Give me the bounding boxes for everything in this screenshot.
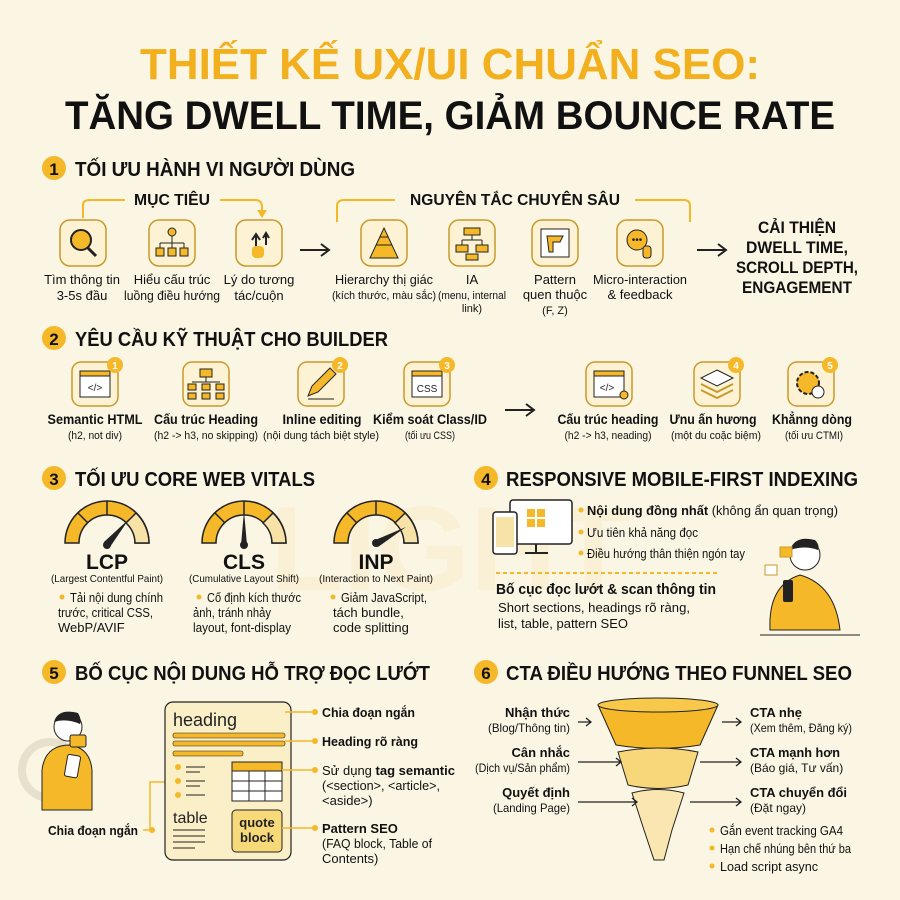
icon: semantic html: </> xyxy=(88,383,102,394)
panel: builder items: (nội dung tách biệt style) xyxy=(263,430,379,442)
icon: layers xyxy=(694,357,744,406)
panel: funnel: Load script async xyxy=(720,859,818,874)
panel: muc tieu xyxy=(44,190,294,303)
panel: gauges: (Cumulative Layout Shift) xyxy=(189,573,299,585)
panel: content layout: Sử dụng tag semantic xyxy=(322,763,455,778)
panel: gauges: (Interaction to Next Paint) xyxy=(319,573,433,585)
icon: IA xyxy=(449,220,495,266)
icon: person with phone xyxy=(760,539,860,635)
text block: result: CẢI THIỆN xyxy=(758,218,836,237)
panel: gauges: CLS xyxy=(223,551,265,574)
icon: pyramid xyxy=(361,220,407,266)
heading 4: 4 xyxy=(481,470,491,489)
icon: css: 3 xyxy=(444,361,450,372)
panel: gauges xyxy=(51,501,433,635)
panel: nguyen tac: Micro-interaction xyxy=(593,272,687,287)
gauge INP xyxy=(334,501,418,547)
panel: funnel: Cân nhắc xyxy=(511,745,570,760)
icon: micro-interaction xyxy=(617,220,663,266)
arrow xyxy=(300,244,329,256)
panel: content layout: Heading rõ ràng xyxy=(322,734,418,749)
panel: gauges: Tải nội dung chính xyxy=(70,590,163,605)
panel: funnel: Nhận thức xyxy=(505,705,570,720)
panel: funnel: CTA mạnh hơn xyxy=(750,745,840,760)
text block: result: SCROLL DEPTH, xyxy=(736,258,858,277)
icon: gear xyxy=(788,357,838,406)
heading 2: 2 xyxy=(49,330,59,349)
icon: layers: 4 xyxy=(733,361,739,372)
panel: funnel: (Landing Page) xyxy=(493,801,570,815)
panel: funnel: (Xem thêm, Đăng ký) xyxy=(750,721,852,735)
document panel: block xyxy=(240,830,275,845)
heading 5: BỐ CỤC NỘI DUNG HỖ TRỢ ĐỌC LƯỚT xyxy=(75,661,430,685)
icon: scroll xyxy=(236,220,282,266)
panel: builder results: (h2 -> h3, neading) xyxy=(564,430,652,442)
heading 6: 6 xyxy=(481,664,491,683)
panel: funnel: Hạn chế nhúng bên thứ ba xyxy=(720,841,852,856)
panel: content layout: <aside>) xyxy=(322,793,373,808)
panel: gauges: Cố định kích thước xyxy=(207,590,301,605)
icon: semantic html: 1 xyxy=(112,361,118,372)
icon: pattern xyxy=(532,220,578,266)
panel: muc tieu: tác/cuộn xyxy=(234,288,284,303)
panel: builder items: (h2 -> h3, no skipping) xyxy=(154,430,258,442)
panel: muc tieu: Tìm thông tin xyxy=(44,272,120,287)
heading 5: 5 xyxy=(49,664,59,683)
heading 2: YÊU CẦU KỸ THUẬT CHO BUILDER xyxy=(75,327,388,351)
panel: mobile first: Nội dung đồng nhất (không ẩn quan trọng) xyxy=(587,503,838,518)
gauge CLS xyxy=(202,501,286,549)
icon: code xyxy=(586,362,632,406)
panel: gauges: layout, font-display xyxy=(193,620,291,635)
panel: gauges: (Largest Contentful Paint) xyxy=(51,573,163,585)
panel: builder results: Cấu trúc heading xyxy=(558,411,658,427)
panel: gauges: tách bundle, xyxy=(333,605,404,620)
panel: mobile first xyxy=(493,500,860,635)
text block: result: ENGAGEMENT xyxy=(742,278,853,297)
icon: gear: 5 xyxy=(827,361,833,372)
panel: gauges: INP xyxy=(358,551,394,574)
panel: builder results: Ưnu ấn hương xyxy=(670,411,756,427)
panel: muc tieu: 3-5s đầu xyxy=(57,288,107,303)
panel: content layout: (<section>, <article>, xyxy=(322,778,440,793)
arrow xyxy=(505,404,534,416)
panel: nguyen tac xyxy=(332,190,690,317)
panel: nguyen tac: Hierarchy thị giác xyxy=(335,272,433,287)
panel: nguyen tac: link) xyxy=(462,303,482,315)
heading 6: CTA ĐIỀU HƯỚNG THEO FUNNEL SEO xyxy=(506,661,852,685)
icon: structure xyxy=(149,220,195,266)
panel: funnel: (Dịch vụ/Sản phẩm) xyxy=(475,761,570,775)
panel: builder items: Cấu trúc Heading xyxy=(154,411,258,427)
panel: content layout: Pattern SEO xyxy=(322,821,398,836)
panel: builder items: Semantic HTML xyxy=(48,411,143,427)
panel: builder items: Inline editing xyxy=(282,411,362,427)
document panel: quote xyxy=(239,815,275,830)
panel: content layout: Chia đoạn ngắn xyxy=(322,705,415,720)
icon: pencil: 2 xyxy=(337,361,343,372)
funnel chart xyxy=(598,698,718,860)
title: THIẾT KẾ UX/UI CHUẨN SEO: xyxy=(140,38,760,89)
icon: heading tree xyxy=(183,362,229,406)
gauge LCP xyxy=(65,501,149,549)
panel: builder items: (h2, not div) xyxy=(68,430,122,442)
icon: person with tablet xyxy=(22,712,92,810)
title: TĂNG DWELL TIME, GIẢM BOUNCE RATE xyxy=(65,92,835,138)
panel: builder items xyxy=(48,357,487,442)
watermark: LIGHT xyxy=(270,482,630,616)
document panel xyxy=(165,702,291,860)
panel: gauges: LCP xyxy=(86,551,128,574)
panel: funnel: CTA chuyển đổi xyxy=(750,785,847,800)
panel: gauges: trước, critical CSS, xyxy=(58,605,153,620)
panel: funnel: Gắn event tracking GA4 xyxy=(720,823,843,838)
panel: builder results: (một du coặc biệm) xyxy=(671,430,761,442)
panel: mobile first: Ưu tiên khả năng đọc xyxy=(587,525,698,540)
icon: css: CSS xyxy=(417,384,438,395)
panel: mobile first: Short sections, headings rõ ràng, xyxy=(498,600,690,615)
icon: micro-interaction: ••• xyxy=(632,235,643,246)
panel: funnel: CTA nhẹ xyxy=(750,705,802,720)
panel: gauges: Giảm JavaScript, xyxy=(341,590,427,605)
panel: builder results: (tối ưu CTMI) xyxy=(785,430,843,442)
icon: search xyxy=(60,220,106,266)
panel: content layout: Contents) xyxy=(322,851,378,866)
icon: semantic html xyxy=(72,357,123,406)
panel: content layout: (FAQ block, Table of xyxy=(322,836,432,851)
panel: content layout xyxy=(22,702,455,866)
panel: nguyen tac: NGUYÊN TẮC CHUYÊN SÂU xyxy=(410,190,620,209)
panel: funnel: (Đặt ngay) xyxy=(750,801,806,815)
icon: code: </> xyxy=(600,383,614,394)
panel: muc tieu: MỤC TIÊU xyxy=(134,190,210,209)
panel: gauges: ảnh, tránh nhảy xyxy=(193,605,271,620)
icon: devices xyxy=(493,500,572,554)
panel: builder items: (tối ưu CSS) xyxy=(405,430,455,442)
panel: nguyen tac: quen thuộc xyxy=(523,287,588,302)
panel: nguyen tac: & feedback xyxy=(607,287,673,302)
panel: nguyen tac: (kích thước, màu sắc) xyxy=(332,289,436,302)
text block: result xyxy=(736,218,858,297)
panel: nguyen tac: (F, Z) xyxy=(542,305,568,317)
icon: pencil xyxy=(298,357,348,406)
panel: builder results xyxy=(558,357,852,442)
document panel: table xyxy=(173,810,208,827)
panel: muc tieu: luồng điều hướng xyxy=(124,288,220,303)
heading 1: 1 xyxy=(49,160,59,179)
heading 3: TỐI ƯU CORE WEB VITALS xyxy=(75,467,315,491)
panel: funnel: (Blog/Thông tin) xyxy=(488,721,570,735)
panel: mobile first: Điều hướng thân thiện ngón tay xyxy=(587,546,745,561)
panel: funnel: Quyết định xyxy=(502,785,570,800)
panel: gauges: WebP/AVIF xyxy=(58,620,125,635)
text block: result: DWELL TIME, xyxy=(746,238,848,257)
heading 1: TỐI ƯU HÀNH VI NGƯỜI DÙNG xyxy=(75,157,355,181)
heading 3: 3 xyxy=(49,470,59,489)
icon: css xyxy=(404,357,455,406)
panel: gauges: code splitting xyxy=(333,620,409,635)
panel: mobile first: Bố cục đọc lướt & scan thông tin xyxy=(496,581,716,598)
panel: muc tieu: Hiểu cấu trúc xyxy=(134,272,211,287)
panel: funnel xyxy=(475,698,852,874)
panel: muc tieu: Lý do tương xyxy=(224,272,294,287)
panel: builder items: Kiểm soát Class/ID xyxy=(373,411,487,427)
panel: funnel: (Báo giá, Tư vấn) xyxy=(750,761,843,775)
heading 4: RESPONSIVE MOBILE-FIRST INDEXING xyxy=(506,469,858,491)
panel: nguyen tac: (menu, internal xyxy=(438,290,506,302)
panel: nguyen tac: IA xyxy=(466,272,478,287)
title xyxy=(65,38,835,138)
panel: mobile first: list, table, pattern SEO xyxy=(498,616,628,631)
arrow xyxy=(697,244,726,256)
panel: nguyen tac: Pattern xyxy=(534,272,576,287)
panel: content layout: Chia đoạn ngắn xyxy=(48,823,138,838)
document panel: heading xyxy=(173,710,237,730)
panel: builder results: Khẳnng dòng xyxy=(772,410,852,427)
